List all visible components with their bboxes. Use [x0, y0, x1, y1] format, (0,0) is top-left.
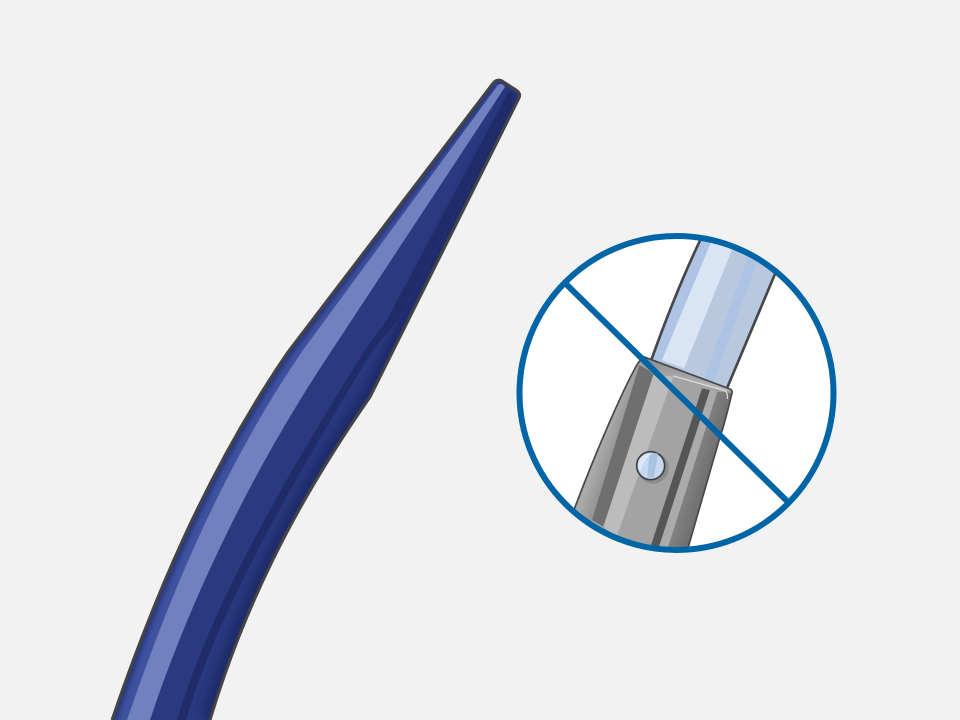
catheter right shading [210, 98, 519, 720]
tube light band [662, 238, 733, 368]
catheter base fill [127, 82, 518, 720]
rivet body [637, 452, 665, 480]
tube edges [652, 235, 777, 389]
sleeve outline [574, 356, 733, 546]
prohibition callout: do not use [520, 235, 834, 565]
tube inner stripe [704, 258, 757, 382]
sleeve right light strip [659, 390, 710, 546]
catheter dark band [177, 91, 516, 720]
prohibition slash [565, 283, 789, 503]
callout white disc [520, 236, 834, 550]
sleeve dark band [592, 365, 654, 527]
prohibition ring [520, 236, 834, 550]
catheter outline [112, 80, 520, 720]
rivet shadow [639, 454, 668, 484]
sleeve light band [603, 375, 673, 537]
tube left tint band [654, 242, 710, 362]
sleeve base [591, 362, 732, 546]
catheter highlight band [127, 84, 505, 720]
rivet stripe [647, 453, 658, 478]
illustration [110, 78, 836, 720]
catheter left edge shading [100, 75, 498, 720]
sleeve highlight [673, 376, 727, 399]
sleeve left gradient [587, 410, 626, 521]
rivet highlight [638, 453, 653, 472]
catheter: blue tapered tip [100, 70, 530, 720]
rivet [637, 452, 669, 484]
clear tube [652, 235, 777, 390]
sleeve dark stripe [650, 388, 710, 550]
sleeve right gradient [668, 392, 732, 547]
sleeve top cap [642, 357, 733, 391]
metal sleeve [574, 356, 733, 547]
